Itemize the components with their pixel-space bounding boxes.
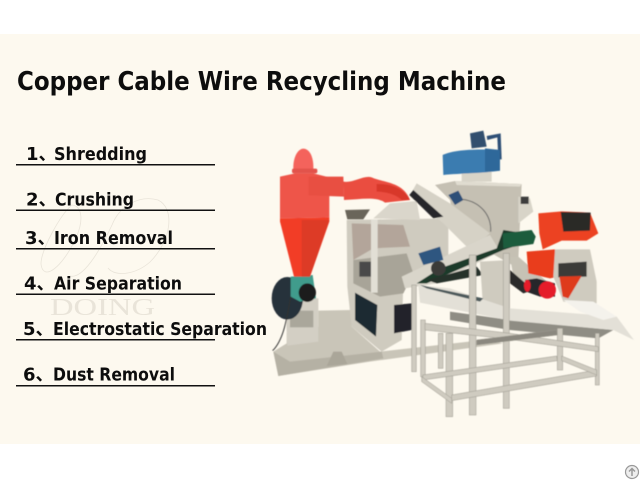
list item 1: Shredding: 1、 <box>26 144 57 165</box>
list item 1: Shredding: Shredding <box>54 144 147 165</box>
red crusher <box>524 211 598 303</box>
list item 2: Crushing: 2、 <box>26 190 57 210</box>
motor stand <box>272 275 318 351</box>
base platform <box>273 310 503 376</box>
list item 4: Air Separation: 4、 <box>24 274 55 294</box>
list item 5: Electrostatic Separation: 5、 <box>23 319 54 340</box>
machine illustration <box>272 131 634 417</box>
title: Copper Cable Wire Recycling Machine <box>17 67 506 97</box>
hopper tower <box>435 170 533 267</box>
list item 2: Crushing: Crushing <box>55 190 134 210</box>
list item 3: Iron Removal <box>16 228 215 250</box>
list item 4: Air Separation: Air Separation <box>54 274 182 294</box>
red cyclone <box>280 149 329 277</box>
icon: upload arrow badge <box>626 466 638 478</box>
separator body <box>345 201 448 352</box>
inclined conveyor upper <box>409 183 491 250</box>
list item 3: Iron Removal: 3、 <box>25 228 56 249</box>
list item 6: Dust Removal <box>16 364 215 386</box>
support panel <box>480 257 557 312</box>
inclined conveyor lower with green belt <box>402 230 536 288</box>
list item 5: Electrostatic Separation: Electrostatic Separation <box>53 319 267 340</box>
blue fan <box>443 131 502 175</box>
vibrating table <box>418 285 634 340</box>
list item 6: Dust Removal: 6、 <box>23 364 54 386</box>
watermark: DOING logo: DOING <box>50 295 155 321</box>
list item 6: Dust Removal: Dust Removal <box>53 364 175 386</box>
watermark: DOING logo <box>41 199 169 321</box>
list item 1: Shredding <box>16 144 215 166</box>
list item 3: Iron Removal: Iron Removal <box>54 228 173 249</box>
list item 2: Crushing <box>16 190 215 211</box>
red duct <box>308 177 410 203</box>
table legs and frame <box>412 253 599 417</box>
